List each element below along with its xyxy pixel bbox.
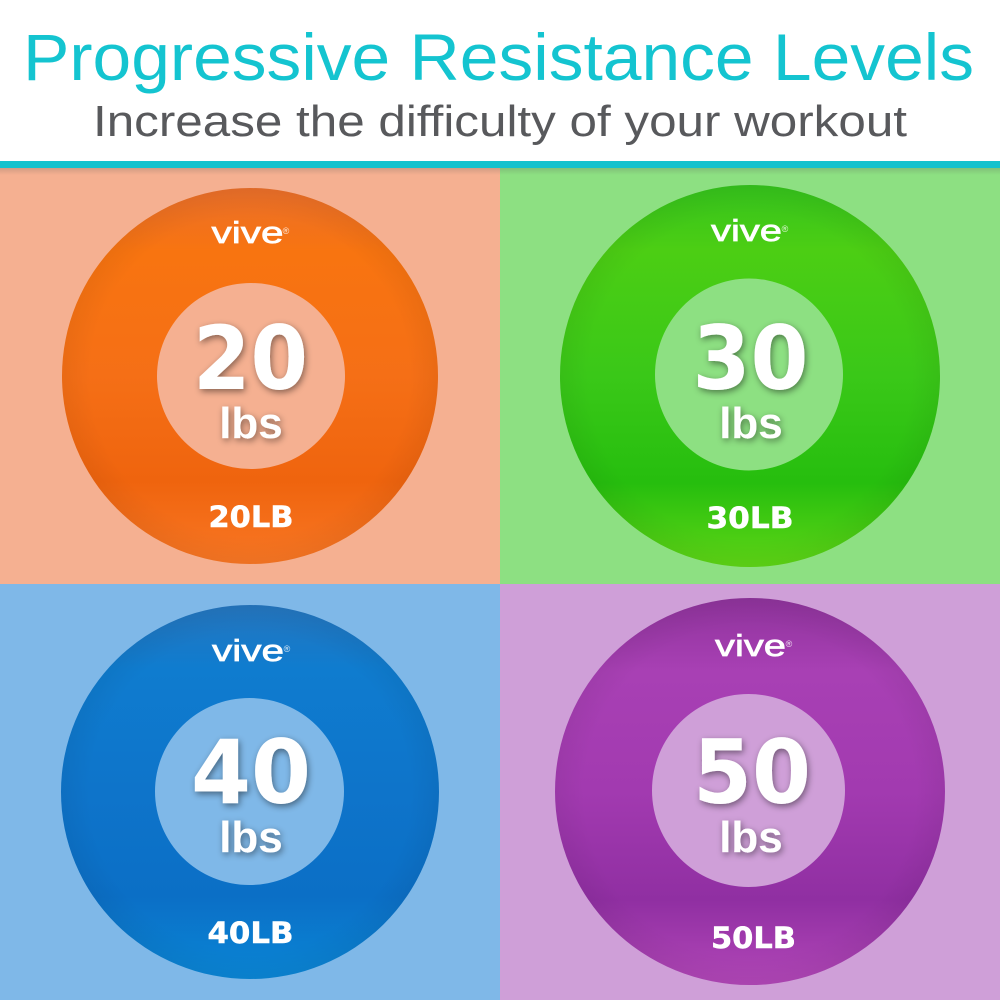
ring logo: ® bbox=[782, 224, 789, 234]
ring logo: vive bbox=[715, 628, 786, 663]
ring logo: ® bbox=[786, 639, 793, 649]
unit: lbs bbox=[719, 813, 783, 862]
number: 50 bbox=[693, 721, 811, 824]
header band bbox=[0, 0, 1000, 160]
ring: purple bbox=[555, 598, 945, 985]
ring weight mark: 20LB bbox=[208, 500, 294, 534]
number: 30 bbox=[692, 307, 808, 410]
panel: 20 lbs bbox=[0, 168, 500, 584]
ring logo: vive bbox=[212, 633, 284, 668]
ring logo: vive bbox=[711, 213, 782, 248]
panel: 40 lbs bbox=[0, 584, 500, 1000]
number: 40 bbox=[191, 721, 311, 824]
ring logo: ® bbox=[284, 644, 291, 654]
number: 20 bbox=[193, 307, 308, 410]
ring: blue bbox=[61, 605, 439, 979]
title: Progressive Resistance Levels bbox=[23, 20, 974, 94]
unit: lbs bbox=[719, 399, 783, 448]
subtitle: Increase the difficulty of your workout bbox=[93, 97, 907, 146]
ring logo: vive bbox=[212, 215, 284, 250]
ring weight mark: 50LB bbox=[711, 921, 796, 955]
unit: lbs bbox=[219, 813, 283, 862]
header rule bbox=[0, 161, 1000, 168]
ring: green bbox=[560, 185, 940, 567]
ring logo: ® bbox=[283, 226, 290, 236]
ring weight mark: 30LB bbox=[706, 501, 794, 535]
panel: 30 lbs bbox=[500, 168, 1000, 584]
unit: lbs bbox=[219, 399, 283, 448]
ring weight mark: 40LB bbox=[208, 916, 294, 950]
panel: 50 lbs bbox=[500, 584, 1000, 1000]
ring: orange bbox=[62, 188, 438, 564]
